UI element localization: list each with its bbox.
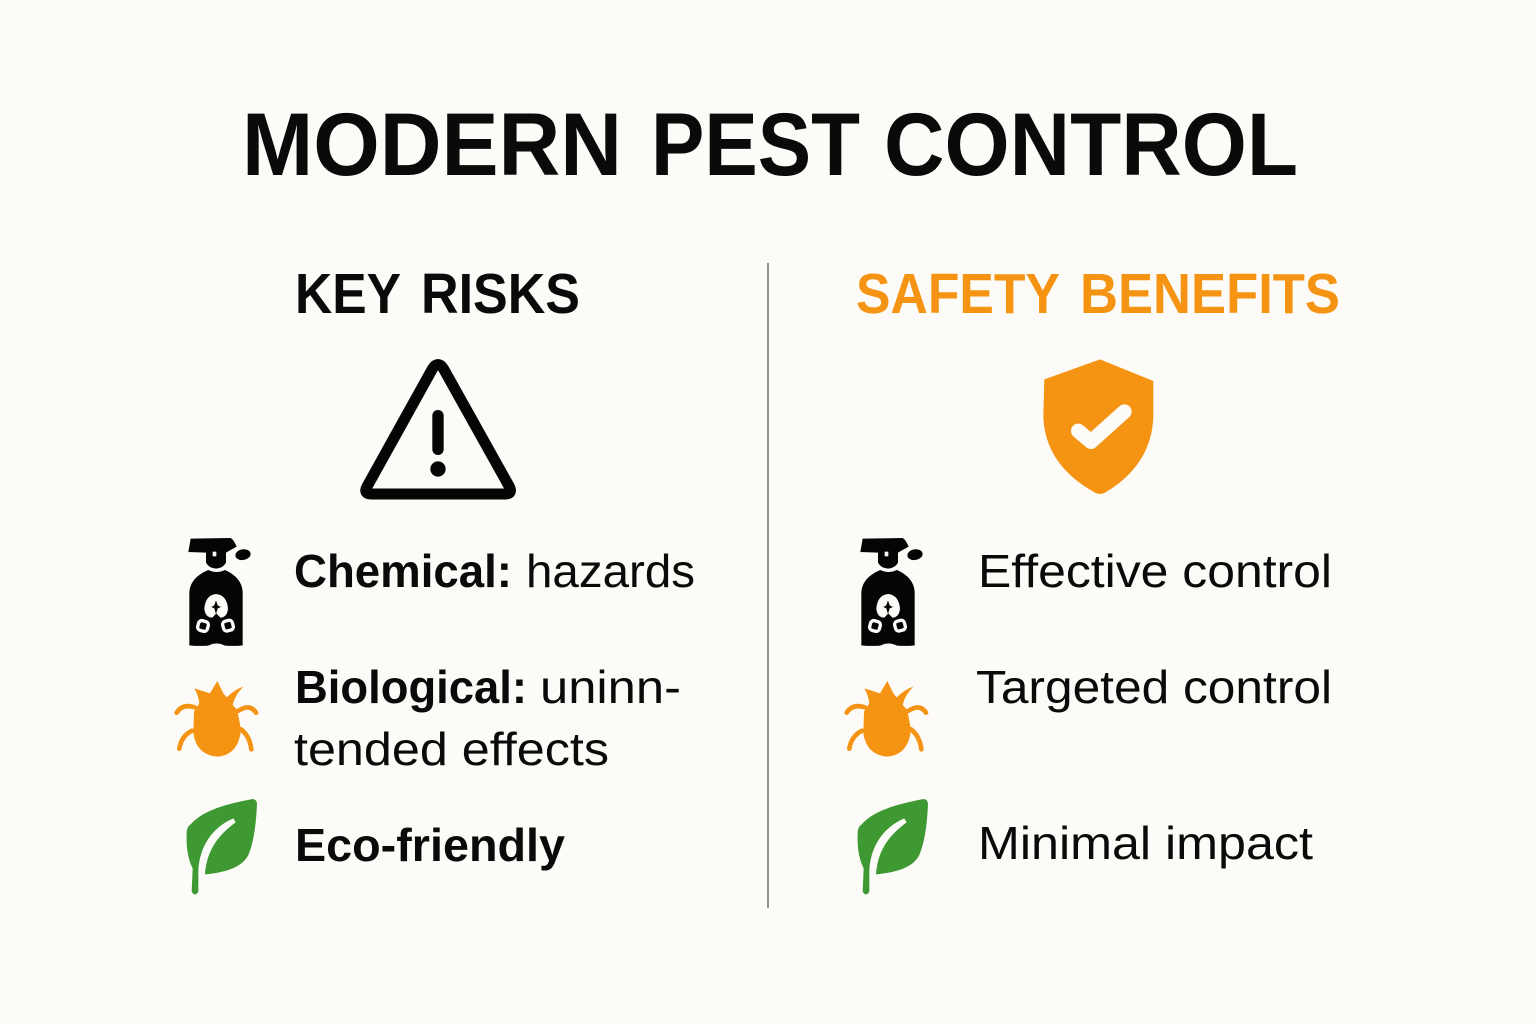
title: MODERN [242, 94, 622, 194]
text: minimal impact: Minimal impact [978, 817, 1313, 869]
icon: shield with check [1043, 359, 1153, 494]
heading: key risks: KEY [295, 262, 401, 326]
heading: key risks: RISKS [421, 262, 580, 326]
text: chemical hazards: Chemical: [294, 545, 512, 597]
text: eco-friendly: Eco-friendly [295, 819, 565, 871]
heading: safety benefits: SAFETY [856, 262, 1060, 326]
title: PEST [651, 94, 860, 194]
panel: safety benefits [847, 262, 1340, 894]
heading: safety benefits: BENEFITS [1080, 262, 1340, 326]
text: biological effects: tended effects [294, 723, 609, 775]
text: biological effects: uninn- [540, 661, 681, 713]
text: chemical hazards: hazards [526, 545, 695, 597]
icon: bug [177, 681, 256, 757]
icon: warning triangle [366, 364, 510, 494]
text: effective control: Effective control [978, 545, 1332, 597]
title: CONTROL [884, 94, 1298, 194]
icon: bug [847, 681, 926, 757]
panel: key risks [177, 262, 695, 894]
text: biological effects: Biological: [295, 661, 527, 713]
icon: leaf [858, 799, 928, 894]
icon: spray bottle [188, 538, 251, 646]
icon: spray bottle [860, 538, 923, 646]
text: targeted control: Targeted control [976, 661, 1332, 713]
icon: leaf [187, 799, 257, 894]
divider between columns [767, 263, 769, 908]
